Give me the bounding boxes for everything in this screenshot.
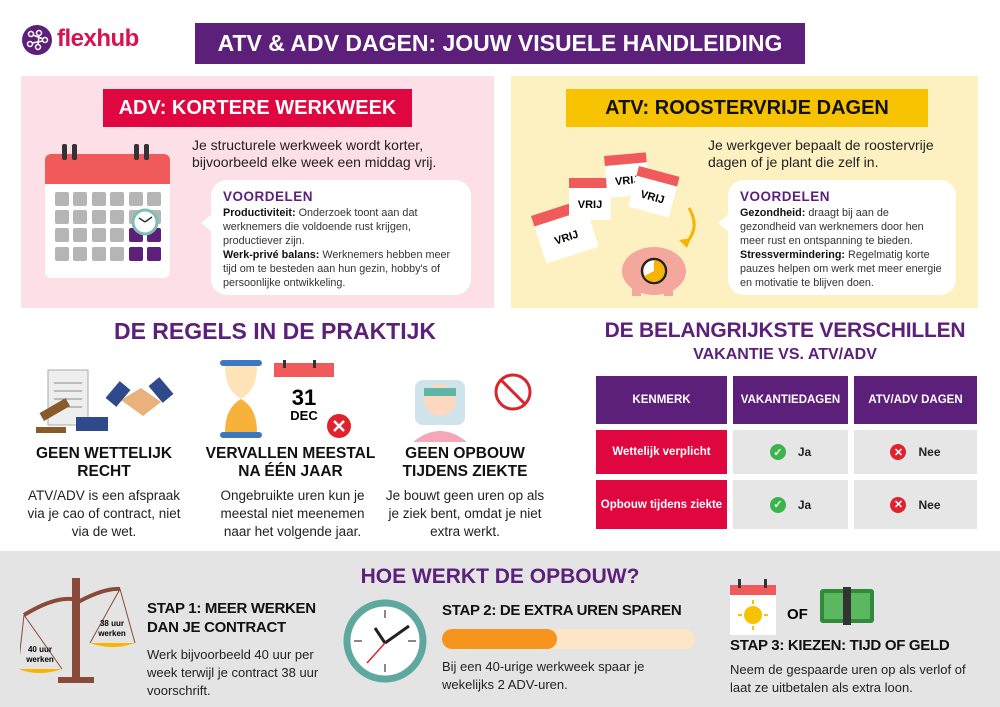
logo <box>22 25 139 55</box>
icon: scale: 40 uur <box>28 645 52 654</box>
callout: voordelen ATV <box>728 180 956 295</box>
icon: clock <box>344 600 426 682</box>
column: geen wettelijk recht: RECHT <box>77 463 131 480</box>
column: geen opbouw ziekte: GEEN OPBOUW <box>405 445 525 462</box>
column: geen opbouw ziekte <box>386 374 544 539</box>
icon: calendar <box>45 144 170 278</box>
icon: vrij calendars and piggy bank: VRIJ <box>553 229 580 248</box>
panel: ATV <box>511 76 978 308</box>
callout: voordelen ATV: VOORDELEN <box>740 189 830 204</box>
icon: hourglass and calendar <box>220 360 351 438</box>
table: comparison <box>596 376 977 529</box>
table: comparison: ✕ <box>894 446 903 458</box>
callout: voordelen ATV: Stressvermindering: Regelmatig korte pauzes helpen om werk met meer energie en motivatie te blijven doen. <box>740 249 942 289</box>
panel: opbouw <box>0 551 1000 707</box>
table: comparison: ✕ <box>894 499 903 511</box>
step 2: STAP 2: DE EXTRA UREN SPAREN <box>442 602 681 619</box>
heading: opbouw: HOE WERKT DE OPBOUW? <box>361 565 639 588</box>
table: comparison: Ja <box>798 445 811 459</box>
column: vervallen: Ongebruikte uren kun je meestal niet meenemen naar het volgende jaar. <box>220 488 365 539</box>
step 3 <box>730 637 966 695</box>
column: geen wettelijk recht <box>27 370 181 539</box>
step 3: STAP 3: KIEZEN: TIJD OF GELD <box>730 637 949 654</box>
step 1: Werk bijvoorbeeld 40 uur per week terwijl je contract 38 uur voorschrift. <box>147 647 318 698</box>
icon: sun calendar or money: OF <box>787 606 808 623</box>
subheading: VAKANTIE VS. ATV/ADV <box>693 346 877 363</box>
column: geen opbouw ziekte: Je bouwt geen uren op als je ziek bent, omdat je niet extra werkt. <box>386 488 544 539</box>
icon: vrij calendars and piggy bank: VRIJ <box>639 189 666 206</box>
icon: vrij calendars and piggy bank <box>531 152 696 296</box>
icon: hourglass and calendar: 31 <box>292 385 316 410</box>
callout: voordelen ADV: Productiviteit: Onderzoek toont aan dat werknemers die voldoende rust krijgen, productiever zijn. <box>223 207 417 247</box>
step 1 <box>147 600 318 698</box>
text: ADV intro: Je structurele werkweek wordt korter, bijvoorbeeld elke week een middag vrij. <box>192 137 436 170</box>
heading: verschillen: DE BELANGRIJKSTE VERSCHILLEN <box>605 319 965 342</box>
text: ATV intro: Je werkgever bepaalt de roostervrije dagen of je plant die zelf in. <box>708 137 934 170</box>
panel: ADV <box>21 76 494 308</box>
column: vervallen: NA ÉÉN JAAR <box>238 463 343 480</box>
icon: sick person and clock <box>413 374 532 442</box>
column: geen wettelijk recht: GEEN WETTELIJK <box>36 445 172 462</box>
column: vervallen: VERVALLEN MEESTAL <box>206 445 375 462</box>
icon: hourglass and calendar: DEC <box>290 408 318 423</box>
column: geen wettelijk recht: ATV/ADV is een afspraak via je cao of contract, niet via de wet. <box>27 488 181 539</box>
column: vervallen <box>206 360 375 539</box>
icon: gavel and handshake <box>36 370 174 433</box>
callout: voordelen ADV <box>211 180 471 295</box>
heading: ATV <box>566 89 928 127</box>
heading: ADV <box>103 89 412 127</box>
table: comparison: Nee <box>918 498 940 512</box>
callout: voordelen ATV: Gezondheid: draagt bij aan de gezondheid van werknemers door hen meer rust en ontspanning te bieden. <box>740 207 924 247</box>
step 1: STAP 1: MEER WERKEN <box>147 600 316 617</box>
step 2: Bij een 40-urige werkweek spaar je wekelijks 2 ADV-uren. <box>442 659 644 692</box>
table: comparison: Nee <box>918 445 940 459</box>
table: comparison: Wettelijk verplicht <box>612 446 711 458</box>
table: comparison: ✓ <box>773 499 782 511</box>
table: comparison: Ja <box>798 498 811 512</box>
table: comparison: Opbouw tijdens ziekte <box>601 498 722 510</box>
step 3: Neem de gespaarde uren op als verlof of laat ze uitbetalen als extra loon. <box>730 662 966 695</box>
callout: voordelen ADV: VOORDELEN <box>223 189 313 204</box>
heading: regels: DE REGELS IN DE PRAKTIJK <box>114 318 436 344</box>
icon: vrij calendars and piggy bank: VRIJ <box>615 174 640 188</box>
icon: scale: 38 uur <box>100 619 124 628</box>
title: ATV & ADV DAGEN: JOUW VISUELE HANDLEIDING <box>218 30 782 56</box>
icon: scale <box>20 578 136 683</box>
table: comparison: KENMERK <box>632 394 691 406</box>
heading: ADV: ADV: KORTERE WERKWEEK <box>119 97 396 119</box>
step 2 <box>442 602 695 692</box>
title <box>195 23 805 64</box>
icon: scale: werken <box>97 629 126 638</box>
icon: sun calendar or money <box>730 579 874 635</box>
progress bar <box>442 629 695 649</box>
heading: ATV: ATV: ROOSTERVRIJE DAGEN <box>605 97 889 119</box>
icon: vrij calendars and piggy bank: VRIJ <box>578 199 602 211</box>
table: comparison: VAKANTIEDAGEN <box>741 394 840 406</box>
icon: scale: werken <box>25 655 54 664</box>
table: comparison: ATV/ADV DAGEN <box>868 394 963 406</box>
step 1: DAN JE CONTRACT <box>147 619 286 636</box>
table: comparison: ✓ <box>773 446 782 458</box>
callout: voordelen ADV: Werk-privé balans: Werknemers hebben meer tijd om te besteden aan hun gezin, hobby's of persoonlijke ontwikkeling. <box>223 249 450 289</box>
column: geen opbouw ziekte: TIJDENS ZIEKTE <box>403 463 527 480</box>
logo: flexhub <box>57 25 139 52</box>
